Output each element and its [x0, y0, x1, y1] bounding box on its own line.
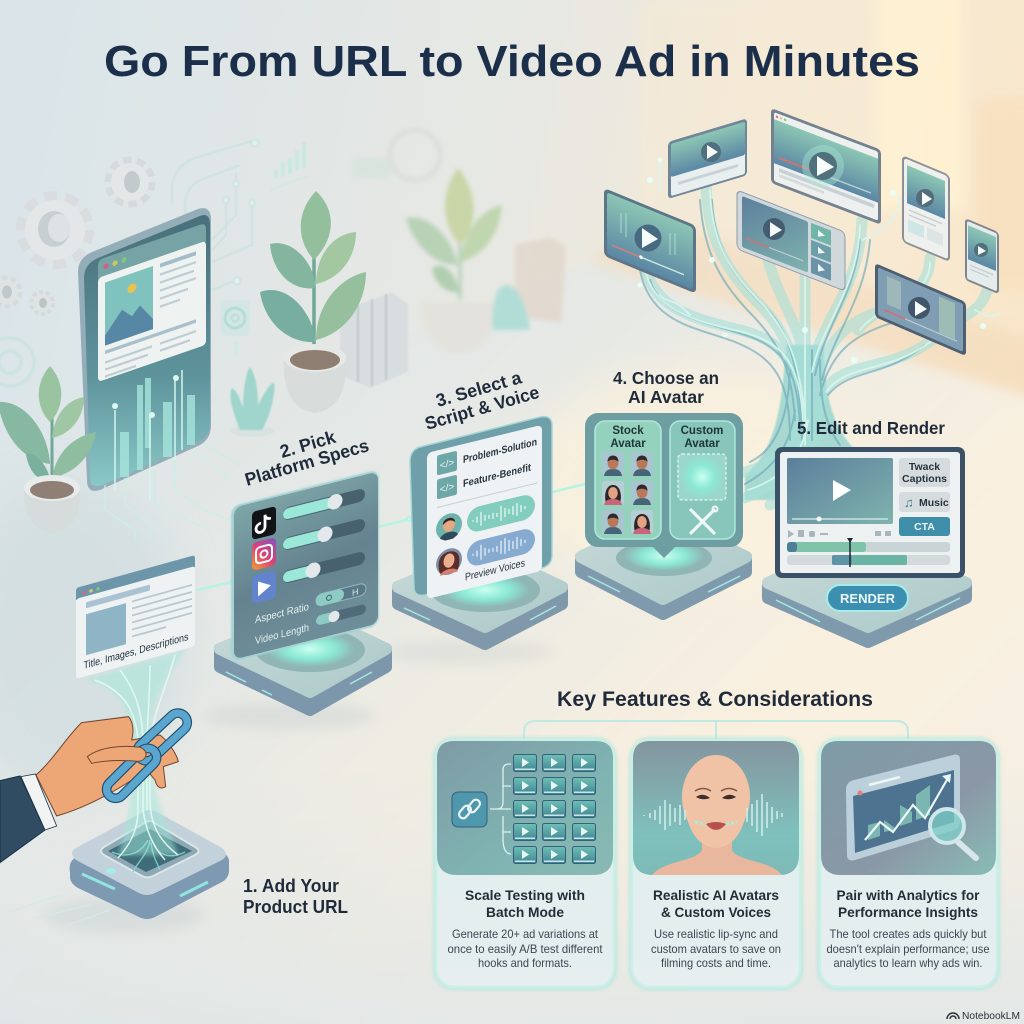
step 4 label [613, 368, 719, 407]
stock avatar card: Avatar [610, 438, 646, 450]
connectors between steps [197, 484, 585, 590]
card 1 body: Generate 20+ ad variations at [452, 927, 599, 941]
aspect ratio control: H [352, 586, 358, 598]
cta button: CTA [914, 521, 935, 533]
aspect ratio control [255, 582, 366, 626]
card 2 body: filming costs and time. [661, 956, 771, 970]
icon: gears [0, 161, 151, 313]
analytics illustration [821, 741, 996, 875]
card 1 body: hooks and formats. [478, 956, 572, 970]
card 3 body: doesn't explain performance; use [826, 942, 990, 956]
card 3 heading [836, 887, 980, 920]
custom avatar card: Avatar [684, 438, 720, 450]
music button [899, 492, 950, 512]
tiktok icon [252, 506, 276, 540]
card 2 body [651, 927, 781, 970]
device: large video player [771, 108, 881, 225]
card 2 body: Use realistic lip-sync and [654, 927, 778, 941]
code icon 2: </> [440, 481, 454, 496]
card 3: analytics [820, 740, 997, 987]
video preview [787, 458, 893, 524]
magnifier [930, 809, 976, 858]
card 2 heading: Realistic AI Avatars [653, 887, 779, 903]
books [340, 292, 408, 388]
batch illustration [437, 741, 613, 875]
NotebookLM watermark: NotebookLM [962, 1010, 1020, 1022]
stock avatar card [595, 421, 661, 539]
device: upper small tablet video [668, 118, 747, 199]
step 2: platform specs panel [231, 469, 379, 662]
connector tree to cards [524, 721, 908, 740]
device: small phone video [965, 218, 999, 294]
sleeve [0, 774, 57, 863]
step 3: script and voice panel: Feature-Benefit [463, 462, 531, 490]
step 3: script and voice panel: Preview Voices [465, 557, 525, 584]
card 3 body: The tool creates ads quickly but [830, 927, 987, 941]
tweak captions button: Twack [909, 461, 940, 473]
music button: ♫ [904, 495, 914, 510]
step 3: script and voice panel: Problem-Solution [463, 436, 537, 466]
card 1 heading: Batch Mode [486, 904, 564, 920]
custom avatar card: Custom [681, 425, 723, 437]
card 2 body: custom avatars to save on [651, 942, 781, 956]
card 1 body: once to easily A/B test different [448, 942, 603, 956]
step 1: browser extraction card: Title, Images, Descriptions [83, 631, 188, 672]
wall decoration: faded charts and circuits [0, 130, 440, 386]
device: dark tablet video [875, 263, 966, 356]
step 2: platform specs base [205, 613, 386, 730]
chain link [103, 709, 191, 802]
video length control: Video Length [255, 622, 309, 647]
step 1 label: 1. Add Your [243, 876, 339, 896]
card 2 heading [653, 887, 779, 920]
avatar illustration [633, 741, 799, 875]
slider 2 [283, 517, 365, 552]
step 3 label: Script & Voice [423, 382, 542, 434]
thumb [87, 746, 146, 763]
plant: central potted plant with books [260, 191, 408, 413]
step 2 label: Platform Specs [243, 435, 371, 490]
circuit traces under tablet [105, 445, 240, 540]
tools icon [691, 506, 718, 533]
step 5: render base [768, 541, 966, 642]
stock avatar card: Stock [612, 425, 644, 437]
card glows [436, 740, 997, 987]
slider 3 [283, 550, 365, 585]
step 1 label: Product URL [243, 897, 348, 917]
timeline [787, 538, 950, 567]
faded background plant, books and vase [406, 168, 566, 354]
step 4 label: 4. Choose an [613, 368, 719, 388]
card 1: batch mode [436, 740, 614, 987]
plant: small succulent [230, 367, 274, 437]
key features heading: Key Features & Considerations [557, 688, 873, 711]
tree of video streams [638, 158, 1000, 505]
tweak captions button [899, 458, 950, 487]
card 3 heading: Pair with Analytics for [836, 887, 980, 903]
music button: Music [919, 497, 949, 509]
tweak captions button: Captions [902, 473, 947, 485]
render button: RENDER [840, 591, 896, 606]
device: left tablet video [604, 188, 696, 294]
video play icon [252, 570, 276, 604]
step 5 label: 5. Edit and Render [797, 418, 945, 438]
step 3: script and voice panel [410, 417, 552, 599]
step 3: script and voice base [385, 551, 562, 664]
player controls [788, 530, 891, 538]
step 1: base with URL stream [10, 810, 229, 933]
device: phone video [902, 155, 950, 262]
panel: left tablet with web page [78, 208, 211, 500]
step 1: browser extraction card [76, 555, 195, 679]
step 4: avatar base [581, 517, 746, 614]
card 2 heading: & Custom Voices [661, 904, 771, 920]
instagram icon [252, 537, 276, 571]
web page card [98, 223, 206, 382]
step 3 label: 3. Select a [434, 367, 525, 411]
video length control [255, 603, 366, 647]
card 1 heading: Scale Testing with [465, 887, 585, 903]
custom avatar card [670, 421, 735, 539]
slider 1 [283, 487, 365, 522]
plant: left front potted plant [0, 366, 96, 533]
card 3 heading: Performance Insights [838, 904, 978, 920]
card 2: avatars [632, 740, 800, 987]
code icon 1: </> [440, 457, 454, 472]
render button [827, 585, 908, 611]
hand [36, 717, 178, 816]
title: Go From URL to Video Ad in Minutes [104, 37, 920, 86]
code icon 1 [437, 451, 457, 476]
cta button [899, 517, 950, 536]
voice 2 [436, 527, 535, 578]
card 3 body [826, 927, 990, 970]
card 1 heading [465, 887, 585, 920]
card 3 body: analytics to learn why ads win. [834, 956, 982, 970]
device: video with playlist [737, 190, 845, 291]
aspect ratio control: Aspect Ratio [255, 601, 309, 626]
step 1: hand holding chain link [0, 709, 191, 863]
step 4: avatar panel [585, 413, 743, 558]
data stream from base to browser [85, 650, 185, 860]
step 5: editor panel [775, 447, 965, 578]
voice 1 [436, 493, 535, 543]
step 2 label: 2. Pick [278, 427, 339, 462]
data bars [120, 378, 195, 477]
card 1 body [448, 927, 603, 970]
code icon 2 [437, 475, 457, 500]
step 4 label: AI Avatar [628, 387, 704, 407]
